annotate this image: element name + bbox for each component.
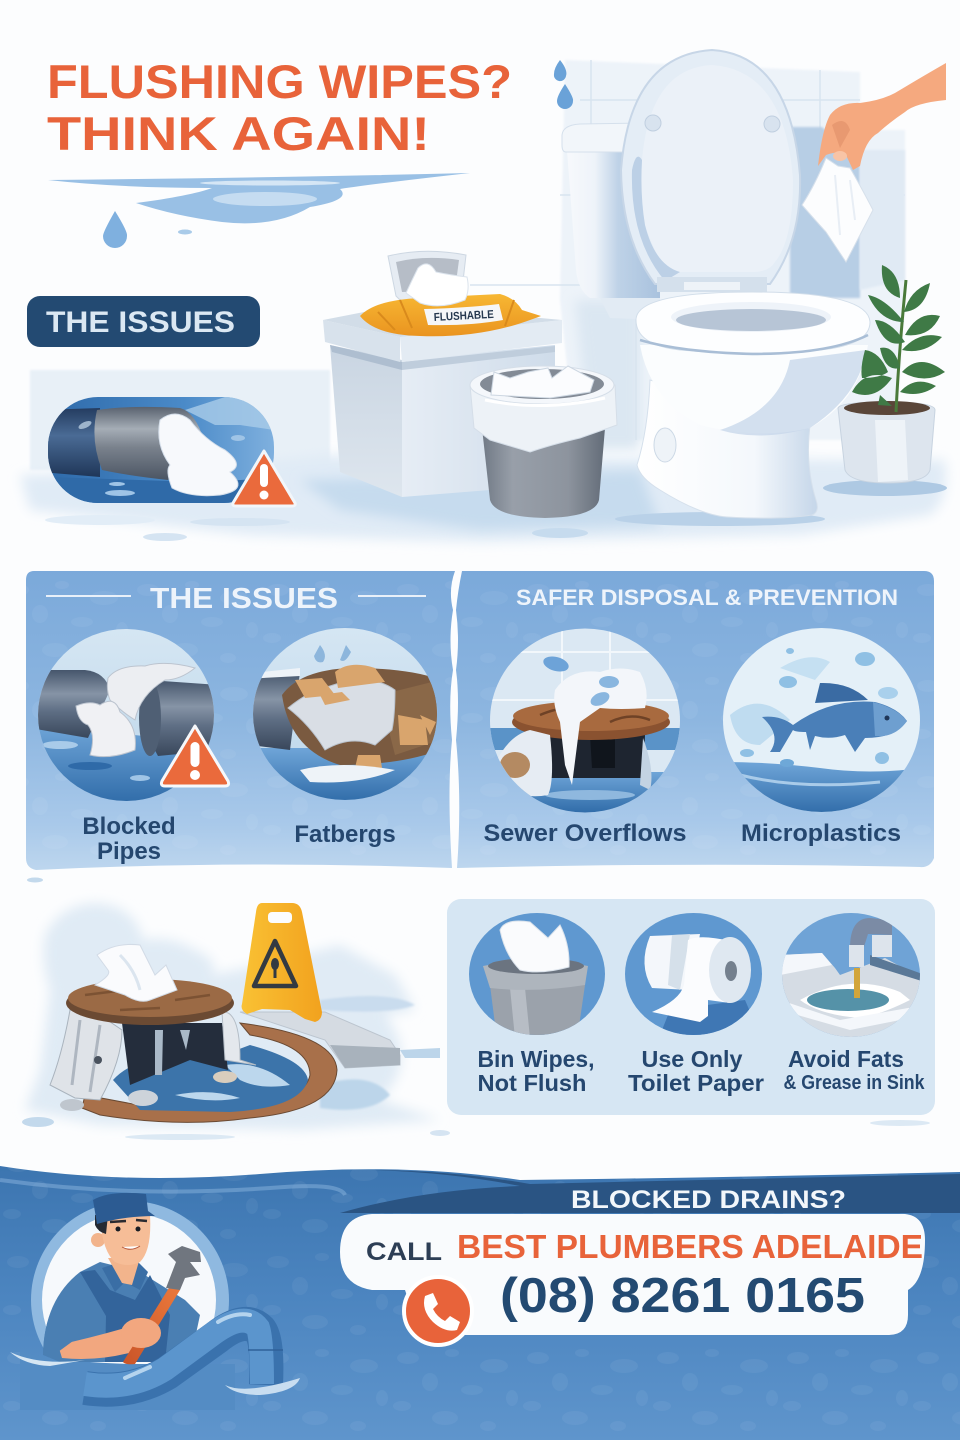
label: use only toilet paper: Use Only [642,1046,743,1072]
illustration: storage cabinet [323,305,562,497]
icon: toilet paper [625,913,762,1035]
icon: sink and tap [780,913,925,1040]
sewer ring and pool [82,1023,337,1122]
title: THINK AGAIN! [47,107,430,160]
concrete slab [240,1012,400,1068]
label: bin wipes not flush: Bin Wipes, [478,1046,594,1072]
water drops near tank [554,60,573,109]
splashes around bottom section [27,878,930,1136]
label: bin wipes not flush: Not Flush [478,1070,586,1096]
water ripples [10,1352,85,1366]
sewer shaft [122,1023,228,1085]
plumber head [91,1233,105,1247]
plumber arm and hand [58,1328,140,1359]
icon: blue pipe [85,1314,283,1390]
label: avoid fats and grease in sink: & Grease in Sink [784,1072,925,1094]
title [47,55,512,160]
toilet lid [621,50,800,292]
illustration: flushable wipes pack [360,251,541,336]
label: microplastics: Microplastics [741,820,901,847]
plumber body [43,1262,200,1362]
illustration: flushable wipes pack: FLUSHABLE [434,309,494,324]
label: sewer overflows: Sewer Overflows [484,820,686,847]
panel: prevention tips [447,899,935,1115]
wrench [123,1246,201,1364]
wet floor [20,455,947,542]
heading pill: the issues: THE ISSUES [46,306,235,339]
icon: phone button [404,1277,472,1345]
bathroom wall background [30,60,905,470]
icon: microplastics fish circle [723,628,920,815]
manhole cover [66,981,234,1025]
panel: safer disposal and prevention [456,571,934,868]
title: FLUSHING WIPES? [47,55,512,108]
illustration: plumber with wrench and pipe [10,1193,300,1410]
icon: wet floor sign [242,903,322,1022]
heading: safer disposal and prevention: SAFER DISPOSAL & PREVENTION [516,585,898,610]
illustration: toilet [562,50,870,518]
illustration: hand dropping wipe [802,63,946,262]
label: bin wipes not flush [478,1046,594,1096]
callout: call best plumbers adelaide [340,1214,925,1345]
toilet tank [562,123,660,320]
plumber portrait ring [31,1201,229,1399]
illustration: waste bin [470,366,617,518]
wipe on cover [95,944,177,1001]
footer band [0,1166,960,1440]
icon: sewer overflows circle [490,628,680,814]
illustration: blocked pipe with warning [40,397,295,510]
heading: the issues: THE ISSUES [150,583,338,615]
heading: blocked drains: BLOCKED DRAINS? [571,1186,846,1214]
heading pill: the issues [27,296,260,347]
icon: bin wipes [469,913,605,1040]
toilet bowl and pedestal [636,292,870,518]
label: blocked pipes: Blocked [82,813,176,840]
text: call: CALL [366,1238,442,1266]
label: use only toilet paper [628,1046,764,1096]
icon: fatbergs circle [250,628,440,803]
text: phone number: (08) 8261 0165 [500,1269,865,1323]
label: fatbergs: Fatbergs [294,821,396,848]
label: blocked pipes second line: Pipes [97,838,161,865]
illustration: overflowing manhole with wet floor sign [22,903,440,1140]
icon: blocked pipes circle [30,629,230,805]
label: avoid fats and grease in sink [784,1046,925,1094]
label: avoid fats and grease in sink: Avoid Fats [788,1046,904,1072]
label: use only toilet paper: Toilet Paper [628,1070,764,1096]
panel: the issues [26,571,455,870]
illustration: potted plant [838,265,945,483]
text: best plumbers adelaide: BEST PLUMBERS ADELAIDE [457,1228,923,1265]
water splash under title [48,173,470,248]
